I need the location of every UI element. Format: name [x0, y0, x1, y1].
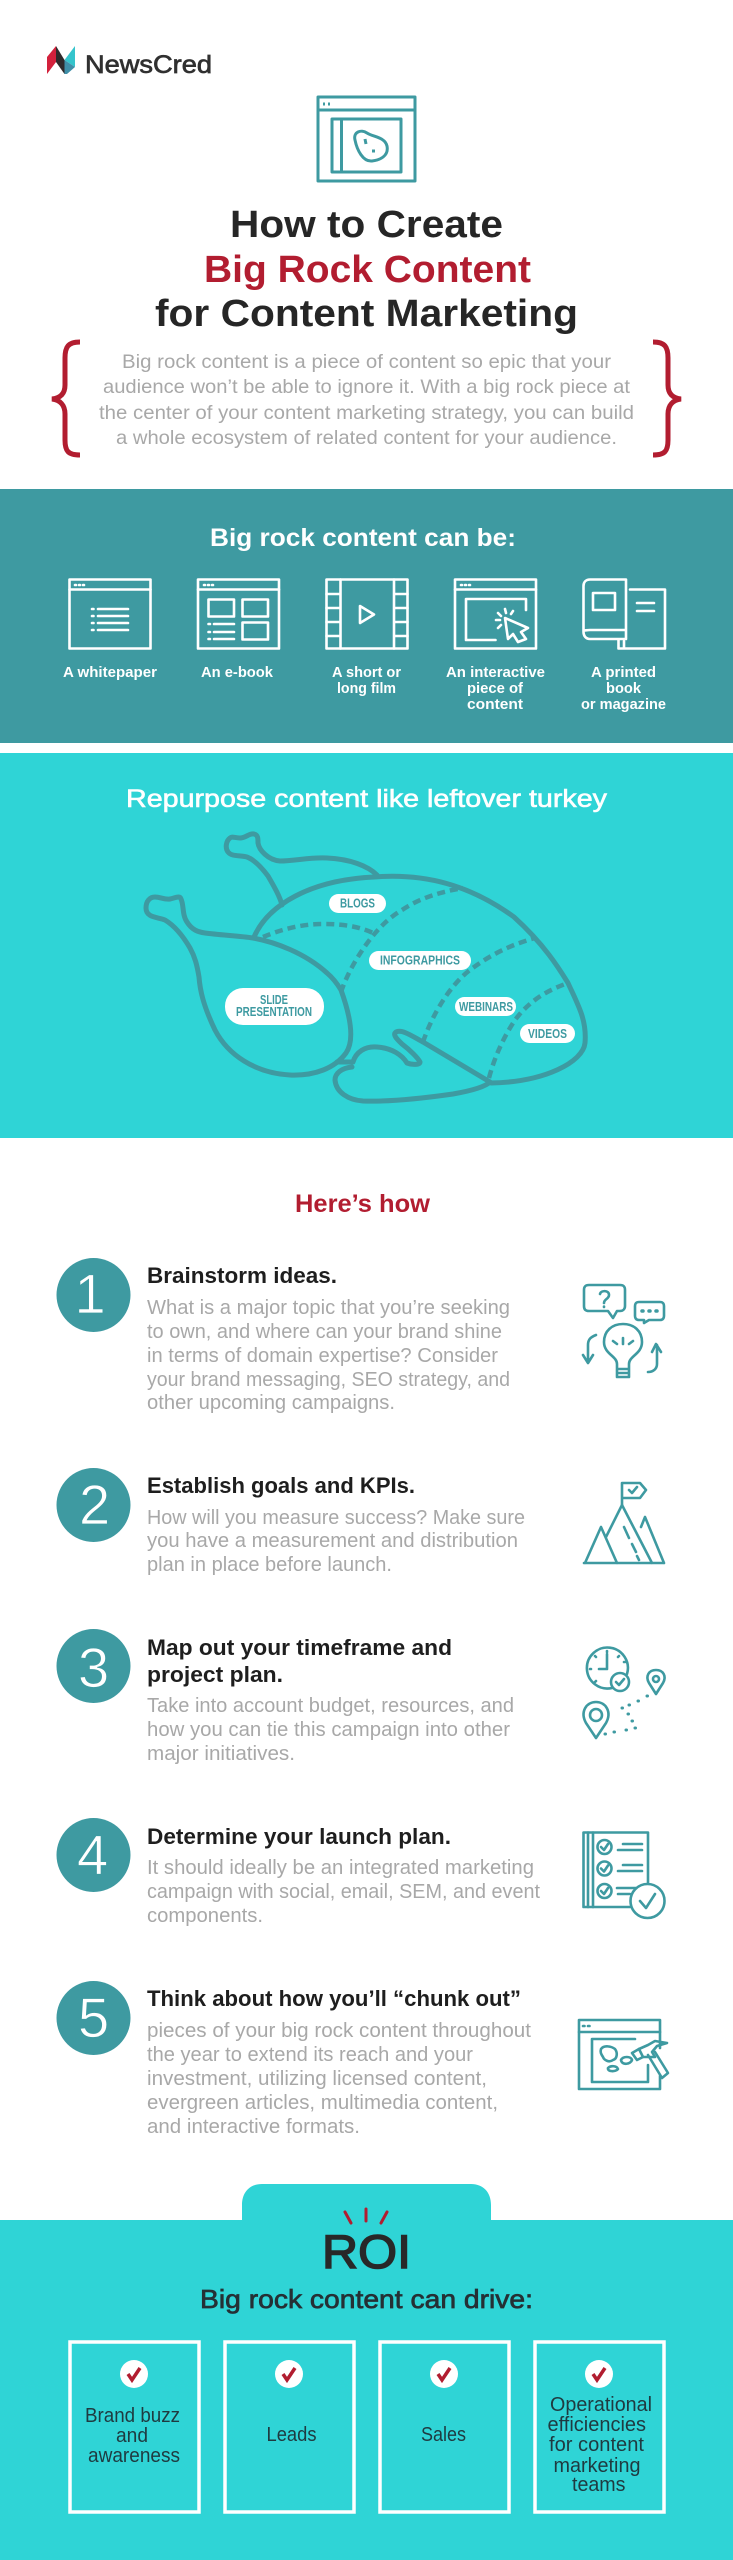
logo: NewsCred: NewsCred [85, 51, 212, 79]
step 4 body: components. [147, 1905, 263, 1927]
step 5 body: pieces of your big rock content throughout [147, 2020, 531, 2042]
step 4 heading: Determine your launch plan. [147, 1824, 451, 1849]
labels: book [606, 680, 642, 697]
icon: clock and map route [584, 1648, 665, 1738]
logo: NewsCred [47, 46, 212, 79]
labels: long film [337, 680, 396, 697]
intro paragraph: audience won’t be able to ignore it. With a big rock piece at [103, 376, 631, 398]
step 5 body: the year to extend its reach and your [147, 2044, 473, 2066]
label: infographics [369, 951, 471, 970]
labels: A short or [332, 664, 401, 681]
label: webinars [455, 997, 516, 1016]
icon: brainstorm [583, 1285, 664, 1377]
number badge 1 [56, 1258, 130, 1332]
step 4 body: It should ideally be an integrated marketing [147, 1857, 534, 1879]
icon: ROI rays [345, 2209, 387, 2223]
title: for Content Marketing [155, 293, 578, 335]
labels: An e-book [201, 664, 274, 681]
panel heading: Repurpose content like leftover turkey [126, 785, 608, 813]
icon: checklist [584, 1832, 664, 1918]
step 2 body: plan in place before launch. [147, 1554, 392, 1576]
icon: chunks and hammer [579, 2020, 668, 2089]
labels: A whitepaper [63, 664, 157, 681]
card: brand buzz: Brand buzz [85, 2405, 180, 2427]
intro paragraph [99, 351, 634, 449]
card: leads [225, 2342, 354, 2512]
icon: film [326, 580, 408, 648]
label: slide presentation: PRESENTATION [236, 1005, 312, 1019]
label: infographics: INFOGRAPHICS [380, 954, 460, 968]
step 1 body: to own, and where can your brand shine [147, 1321, 502, 1343]
labels [63, 664, 666, 713]
label: videos: VIDEOS [528, 1027, 567, 1041]
icon: interactive [455, 580, 536, 648]
card: brand buzz: and [116, 2425, 148, 2447]
step 3 [56, 1629, 665, 1765]
step 5 body: investment, utilizing licensed content, [147, 2068, 487, 2090]
number badge 3: 3 [78, 1636, 109, 1699]
labels: A printed [591, 664, 656, 681]
icon: e-book [198, 580, 279, 648]
labels: or magazine [581, 696, 666, 713]
title: Big Rock Content [204, 249, 531, 291]
intro paragraph: the center of your content marketing strategy, you can build [99, 402, 634, 424]
step 5 [56, 1981, 668, 2138]
step 1 body: other upcoming campaigns. [147, 1392, 395, 1414]
step 3 body: how you can tie this campaign into other [147, 1719, 510, 1741]
step 1 body: What is a major topic that you’re seeking [147, 1297, 510, 1319]
step 5 body [147, 2020, 531, 2138]
card: operational efficiencies [535, 2342, 664, 2512]
number badge 2 [56, 1468, 130, 1542]
step 3 body [147, 1695, 514, 1765]
step 4 body: campaign with social, email, SEM, and event [147, 1881, 540, 1903]
number badge 4: 4 [77, 1823, 108, 1886]
card: operational efficiencies: marketing [554, 2455, 640, 2477]
ROI heading: ROI [322, 2225, 411, 2278]
labels: content [467, 696, 523, 713]
number badge 5: 5 [78, 1986, 109, 2049]
panel: big rock content can be [0, 489, 733, 743]
right curly bracket [653, 342, 681, 455]
number badge 2: 2 [79, 1473, 110, 1536]
label: slide presentation: SLIDE [260, 993, 288, 1007]
step 3 heading [147, 1635, 452, 1687]
title [155, 204, 578, 335]
number badge 4 [56, 1818, 130, 1892]
panel: repurpose content [0, 753, 733, 1138]
icon: printed book and magazine [584, 580, 665, 648]
panel heading: Big rock content can be: [210, 524, 516, 552]
step 2 body: you have a measurement and distribution [147, 1530, 518, 1552]
step 3 heading: project plan. [147, 1662, 283, 1687]
card: brand buzz [70, 2342, 199, 2512]
icon: browser window with big rock [318, 97, 415, 181]
label: slide presentation [225, 988, 324, 1025]
intro paragraph: Big rock content is a piece of content so epic that your [122, 351, 612, 373]
step 4 body [147, 1857, 540, 1927]
card: operational efficiencies: efficiencies [548, 2414, 646, 2436]
step 2 heading: Establish goals and KPIs. [147, 1473, 415, 1498]
step 3 body: Take into account budget, resources, and [147, 1695, 514, 1717]
step 4 [56, 1818, 664, 1927]
card: brand buzz: awareness [88, 2445, 180, 2467]
labels: An interactive [446, 664, 545, 681]
left curly bracket [52, 342, 80, 455]
card: sales [380, 2342, 509, 2512]
step 3 body: major initiatives. [147, 1743, 295, 1765]
panel: ROI [0, 2184, 733, 2560]
number badge 1: 1 [74, 1262, 106, 1325]
step 5 body: evergreen articles, multimedia content, [147, 2092, 498, 2114]
step 2 body: How will you measure success? Make sure [147, 1507, 525, 1529]
step 2 body [147, 1507, 525, 1576]
label: blogs: BLOGS [340, 896, 375, 910]
label: videos [520, 1024, 575, 1043]
ROI subheading: Big rock content can drive: [200, 2284, 533, 2314]
labels: piece of [467, 680, 524, 697]
step 2 [56, 1468, 664, 1576]
card: sales: Sales [421, 2424, 466, 2446]
step 5 heading: Think about how you’ll “chunk out” [147, 1986, 521, 2011]
step 1 body [147, 1297, 510, 1414]
step 1 body: in terms of domain expertise? Consider [147, 1345, 498, 1367]
label: blogs [329, 894, 386, 913]
step 1 heading: Brainstorm ideas. [147, 1263, 337, 1288]
step 3 heading: Map out your timeframe and [147, 1635, 452, 1660]
heading: here's how: Here’s how [295, 1190, 431, 1218]
intro paragraph: a whole ecosystem of related content for your audience. [116, 427, 617, 449]
step 1 body: your brand messaging, SEO strategy, and [147, 1369, 510, 1391]
number badge 5 [56, 1981, 130, 2055]
icon: mountain flag [584, 1483, 664, 1563]
card: operational efficiencies: for content [549, 2434, 644, 2456]
number badge 3 [56, 1629, 130, 1703]
card: leads: Leads [266, 2424, 316, 2446]
step 5 body: and interactive formats. [147, 2116, 360, 2138]
illustration: turkey [146, 834, 585, 1101]
icon: whitepaper [70, 580, 150, 648]
step 1 [56, 1258, 664, 1414]
card: operational efficiencies: teams [572, 2474, 626, 2496]
title: How to Create [230, 204, 503, 246]
card: operational efficiencies: Operational [550, 2394, 652, 2416]
label: webinars: WEBINARS [459, 1000, 513, 1014]
